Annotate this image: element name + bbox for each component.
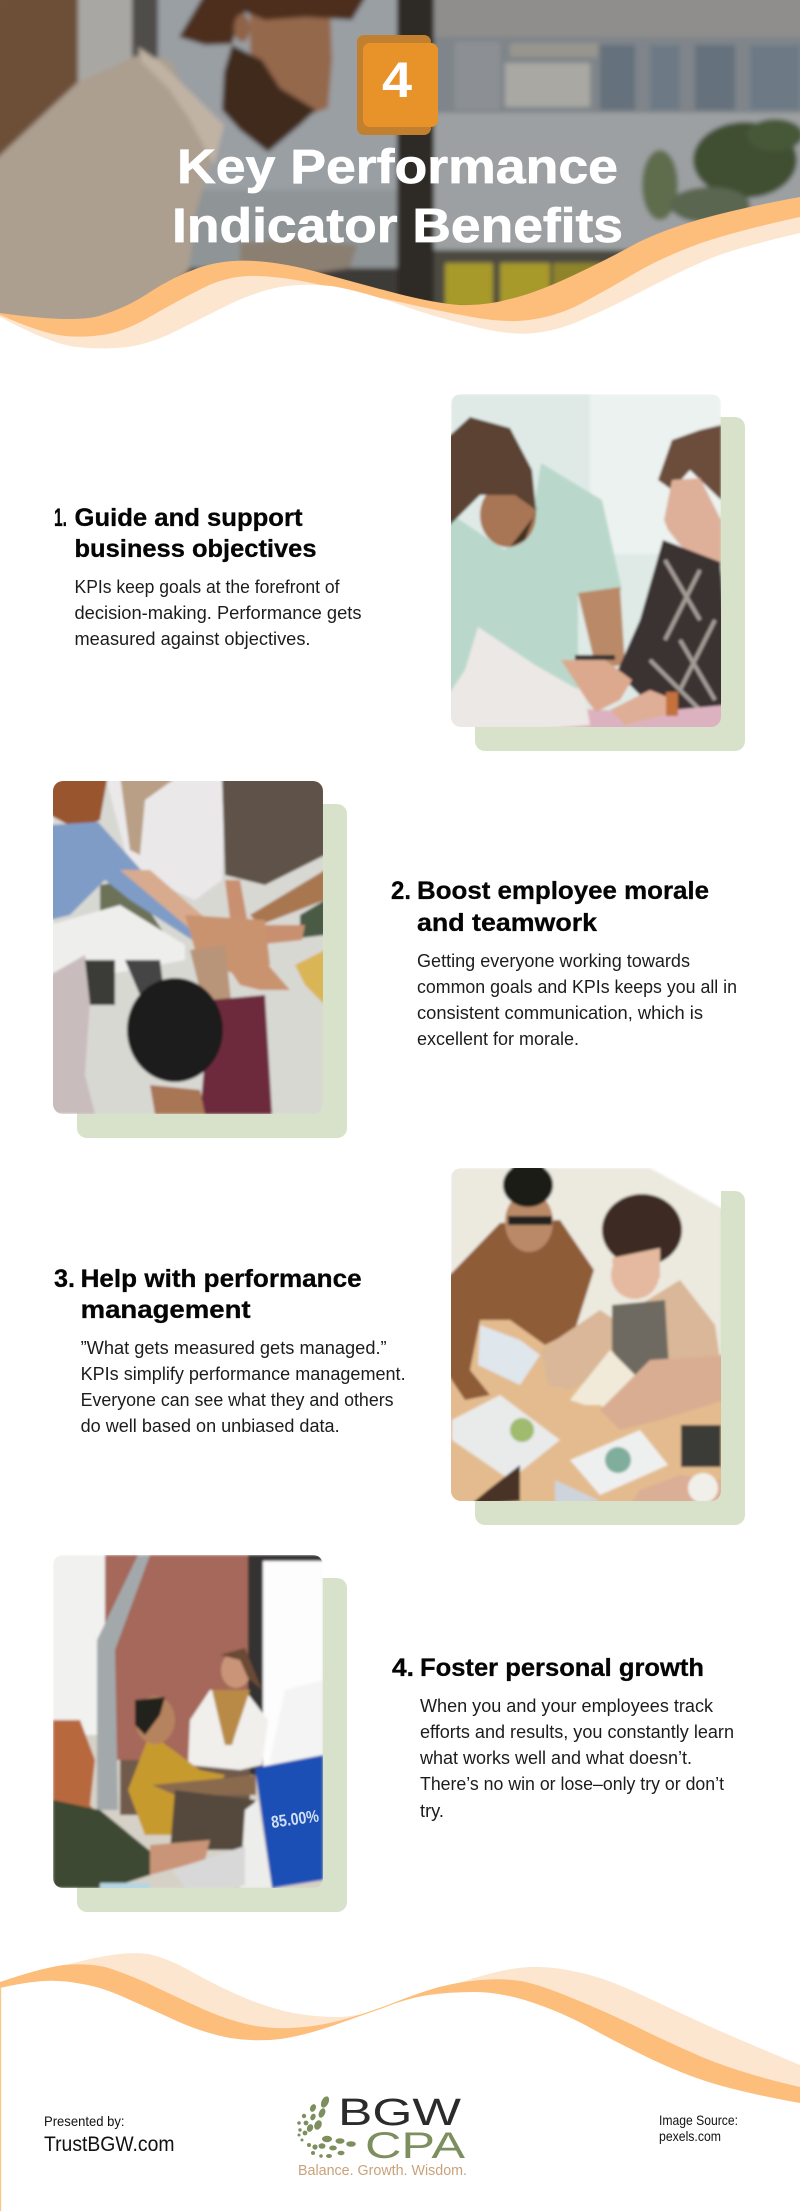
face: [250, 5, 332, 118]
heading 2: Boost employee morale: [417, 877, 709, 905]
body text 4: [419, 1696, 734, 1821]
footer wave: pale band: [0, 1953, 800, 2115]
body text 2: excellent for morale.: [417, 1029, 579, 1049]
body text 1: decision-making. Performance gets: [74, 603, 362, 623]
photo 4: team working in a brick office: [53, 1555, 323, 1889]
header banner: [0, 0, 800, 370]
green backing panel 4: [77, 1578, 347, 1912]
green backing panel 2: [77, 804, 347, 1138]
footer wave: white edge: [0, 1981, 800, 2211]
BGW CPA logo: [297, 2092, 467, 2179]
heading 1: business objectives: [74, 535, 316, 563]
heading 4: 4.: [392, 1654, 414, 1682]
heading 3: [54, 1265, 362, 1324]
section 3: help with performance management: [54, 1163, 745, 1525]
photo 3: colleagues reviewing charts at a table: [445, 1163, 725, 1505]
badge: number 4: [357, 35, 438, 135]
body text 3: Everyone can see what they and others: [81, 1390, 394, 1410]
photo 2: team stacking hands: [50, 775, 325, 1114]
presented by credit: Presented by:: [44, 2113, 124, 2129]
BGW CPA logo: Balance. Growth. Wisdom.: [298, 2162, 467, 2179]
photo 1: two colleagues reviewing papers: [445, 394, 730, 735]
body text 2: common goals and KPIs keeps you all in: [417, 977, 737, 997]
beard: [222, 45, 316, 152]
green backing panel 1: [475, 417, 745, 751]
top wave: white edge: [0, 233, 800, 370]
body text 4: what works well and what doesn’t.: [419, 1748, 692, 1768]
body text 4: When you and your employees track: [420, 1696, 714, 1716]
body text 2: Getting everyone working towards: [417, 951, 690, 971]
top wave: pale band: [0, 217, 800, 360]
heading 2: and teamwork: [417, 909, 597, 937]
header photo: man smiling in an office: [0, 0, 800, 319]
logo mark: leaf dots: [297, 2095, 356, 2158]
heading 4: Foster personal growth: [420, 1654, 704, 1682]
image source credit: pexels.com: [659, 2128, 721, 2144]
image source credit: [659, 2112, 738, 2144]
title: Key Performance: [177, 141, 618, 194]
presented by credit: TrustBGW.com: [44, 2133, 174, 2156]
heading 2: 2.: [391, 877, 411, 905]
presented by credit: [44, 2113, 174, 2156]
body text 4: efforts and results, you constantly learn: [420, 1722, 734, 1742]
body text 1: [74, 577, 362, 649]
body text 2: [417, 951, 737, 1049]
section 1: guide and support business objectives: [54, 394, 745, 751]
body text 3: [81, 1338, 406, 1436]
heading 3: 3.: [54, 1265, 75, 1293]
top wave: orange band: [0, 197, 800, 360]
body text 2: consistent communication, which is: [417, 1003, 703, 1023]
heading 3: Help with performance: [81, 1265, 362, 1293]
section 2: boost employee morale and teamwork: [50, 775, 737, 1138]
heading 2: [391, 877, 709, 937]
section 4: foster personal growth: [53, 1555, 734, 1912]
heading 1: 1.: [54, 504, 67, 532]
footer wave: orange band: [0, 1964, 800, 2115]
heading 3: management: [81, 1296, 251, 1324]
heading 1: [54, 504, 316, 563]
title: [172, 141, 623, 253]
photo 4: team working in a brick office: 85.00%: [270, 1806, 320, 1832]
green backing panel 3: [475, 1191, 745, 1525]
body text 3: ”What gets measured gets managed.”: [81, 1338, 387, 1358]
shirt: [0, 55, 214, 335]
heading 1: Guide and support: [74, 504, 303, 532]
body text 3: KPIs simplify performance management.: [81, 1364, 406, 1384]
badge: number 4: 4: [382, 52, 412, 108]
title: Indicator Benefits: [172, 200, 623, 253]
body text 3: do well based on unbiased data.: [81, 1416, 340, 1436]
image source credit: Image Source:: [659, 2112, 738, 2128]
body text 1: KPIs keep goals at the forefront of: [74, 577, 340, 597]
BGW CPA logo: BGW: [338, 2092, 461, 2134]
body text 1: measured against objectives.: [74, 629, 310, 649]
body text 4: try.: [420, 1801, 444, 1821]
BGW CPA logo: CPA: [365, 2125, 465, 2166]
footer: [0, 1953, 800, 2211]
body text 4: There’s no win or lose–only try or don’t: [420, 1774, 724, 1794]
hair: [179, 0, 367, 45]
